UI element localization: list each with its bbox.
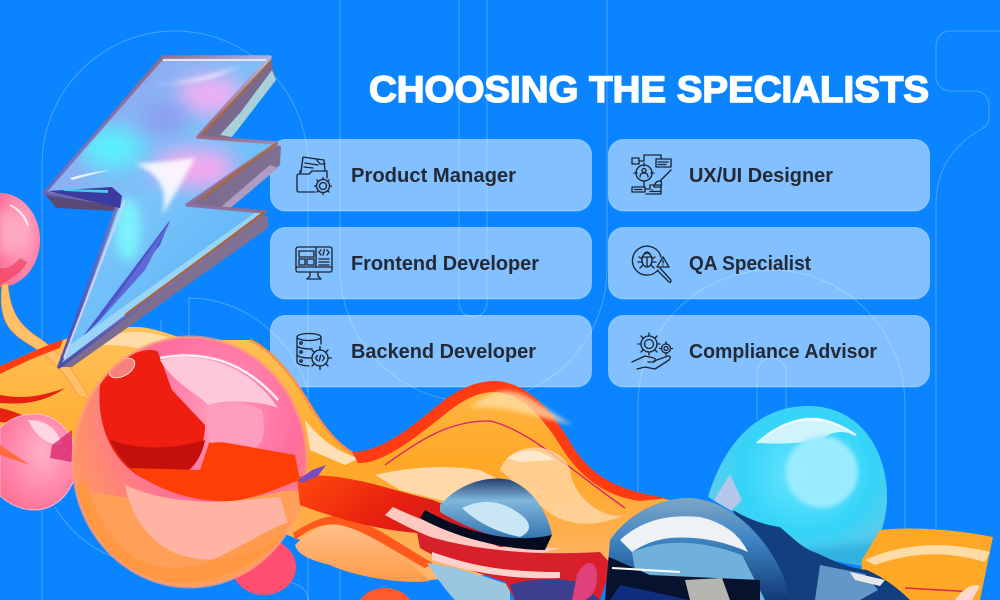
thin orange strand from bubble — [1, 284, 90, 400]
label: Frontend Developer: Frontend Developer — [351, 253, 539, 275]
big pink glass bubble — [60, 337, 310, 587]
pale pink reflection — [160, 357, 278, 408]
icon: UX design tools — [632, 155, 671, 194]
main red ribbon — [297, 476, 520, 548]
label: Compliance Advisor: Compliance Advisor — [689, 341, 877, 363]
right orange wave — [860, 529, 993, 600]
pink swirl at bottom — [572, 563, 597, 600]
label: Product Manager: Product Manager — [351, 165, 516, 187]
icon: bug under magnifier — [632, 246, 671, 282]
purple bottom pool — [510, 579, 600, 600]
left red streak — [0, 388, 72, 440]
rim — [73, 337, 307, 587]
left pink bubble — [0, 414, 77, 510]
lower orange fold — [295, 524, 430, 582]
purple spark on ribbon — [298, 465, 326, 483]
dark glass bubble — [590, 498, 790, 600]
icon: holographic lightning bolt — [44, 57, 281, 367]
small red bubble under main — [232, 539, 296, 595]
right wave red rim — [352, 381, 668, 501]
pale top of left wave — [95, 332, 178, 352]
bolt front face — [44, 57, 277, 367]
dark blue bubble left — [420, 478, 552, 550]
peach rim beside big bubble — [250, 340, 360, 457]
red inner sphere — [99, 350, 205, 483]
label: QA Specialist: QA Specialist — [689, 253, 811, 275]
red rim of left wave — [0, 340, 63, 374]
glass droplet on wave — [500, 448, 625, 524]
lower peach sphere — [76, 490, 300, 587]
bolt side faces — [59, 57, 281, 367]
dark ribbon right of bubble — [733, 510, 910, 600]
light blue blob under ribbon — [427, 563, 510, 600]
panel: specialist cards — [270, 140, 930, 387]
pale orange reflection — [375, 467, 500, 505]
pale ribbon stripe — [385, 507, 560, 560]
icon: database with code gear — [297, 334, 332, 370]
card: Frontend Developer — [270, 228, 592, 299]
card: Product Manager — [270, 140, 592, 211]
card: UX/UI Designer — [608, 140, 930, 211]
orange red core — [130, 440, 300, 501]
icon: code monitor — [296, 247, 332, 279]
top-left pink bubble — [0, 193, 40, 287]
liquid glass wave artwork — [0, 193, 993, 600]
icon: folder with gear — [297, 157, 332, 194]
label: UX/UI Designer: UX/UI Designer — [689, 165, 833, 187]
orange wave body — [0, 327, 720, 580]
bolt edge bevels — [44, 57, 277, 367]
icon: gears over hand — [632, 333, 672, 369]
red strand over fold — [293, 516, 433, 568]
small red bubble bottom — [360, 588, 410, 600]
iridescent colour patches — [59, 65, 265, 367]
card: Compliance Advisor — [608, 316, 930, 387]
card: Backend Developer — [270, 316, 592, 387]
orange band — [70, 480, 310, 583]
pale lower stripes — [432, 552, 560, 578]
card: QA Specialist — [608, 228, 930, 299]
lower red ribbon — [417, 533, 612, 600]
title: CHOOSING THE SPECIALISTS — [369, 68, 929, 110]
label: Backend Developer: Backend Developer — [351, 341, 536, 363]
magenta thread on wave — [385, 421, 625, 508]
left lower side face — [44, 193, 118, 211]
right wave pale highlight — [470, 391, 572, 425]
top arc highlight — [160, 356, 278, 400]
cyan balloon — [708, 406, 890, 570]
